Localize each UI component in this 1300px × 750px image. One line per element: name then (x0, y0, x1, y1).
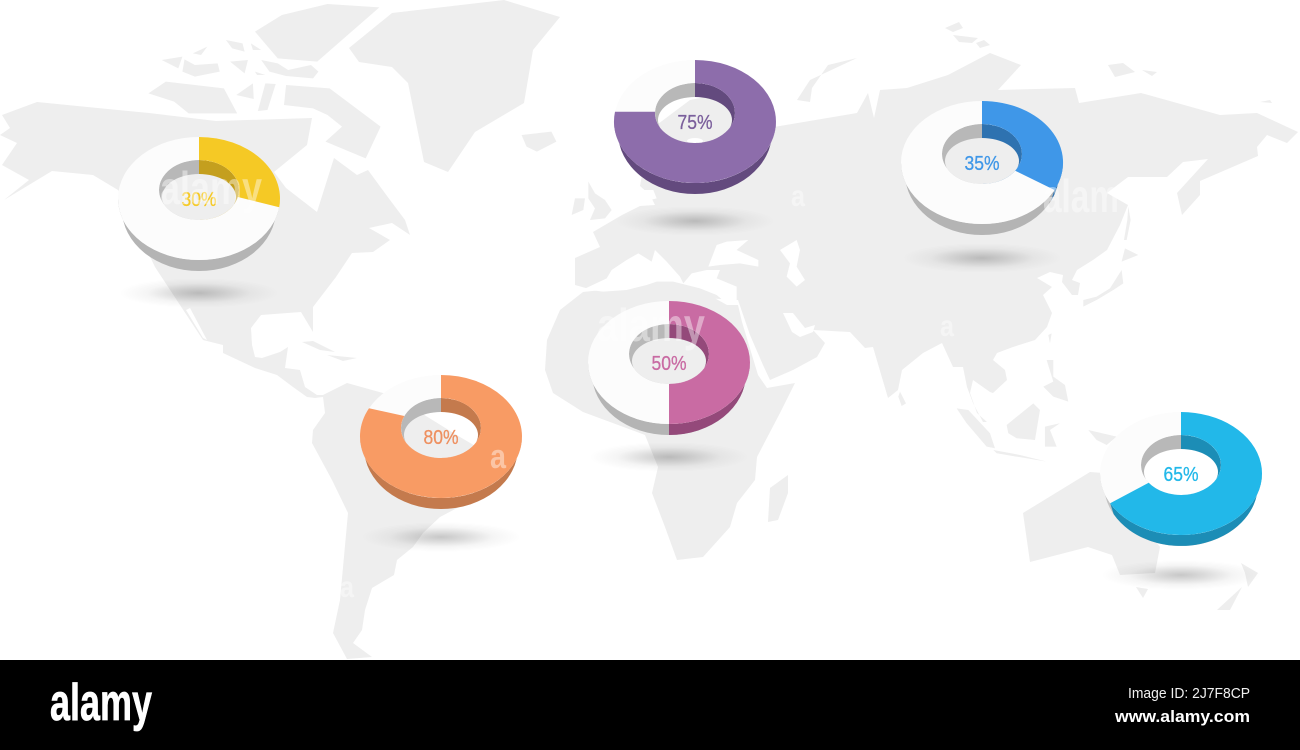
shadows (119, 206, 1261, 590)
watermarks: alamy (160, 162, 262, 214)
slice (360, 375, 522, 498)
Africa (545, 285, 795, 560)
slice (982, 101, 1063, 190)
label: 30% (182, 189, 217, 211)
donut: 30% yellow (118, 137, 280, 271)
Asian islands (898, 207, 1138, 462)
Tasmania and New Zealand (1136, 563, 1258, 610)
North and South America (0, 102, 500, 659)
slice (614, 60, 776, 183)
donut: 80% orange (360, 375, 522, 509)
footer logo: alamy (50, 674, 152, 732)
watermarks (160, 162, 1119, 604)
watermarks: a (940, 310, 954, 343)
slice (669, 301, 750, 424)
Persian Gulf (783, 313, 815, 337)
Baja strait (186, 308, 207, 340)
watermarks: a (340, 571, 354, 604)
donut: 65% cyan (1100, 412, 1262, 546)
label: 50% (652, 353, 687, 375)
watermarks: alamy (597, 299, 705, 351)
label: 35% (964, 153, 1000, 175)
Britain and Ireland (572, 182, 612, 220)
donut: 75% purple (614, 60, 776, 194)
Greenland (349, 0, 560, 172)
donut: 50% pink (588, 301, 750, 435)
watermarks: a (490, 438, 507, 476)
donut: 35% blue (901, 101, 1063, 235)
watermarks: a (791, 180, 805, 213)
watermarks: alam (1043, 170, 1119, 222)
Canadian Arctic islands (148, 4, 556, 158)
footer bar (0, 660, 1300, 750)
seas (186, 138, 815, 340)
Australia (1023, 472, 1160, 575)
slice (199, 137, 280, 207)
image id: Image ID: 2J7F8CP (1128, 686, 1250, 702)
slice (1110, 412, 1262, 535)
Eurasia (575, 53, 1298, 422)
Mediterranean (583, 190, 805, 303)
label: 80% (424, 427, 459, 449)
label: 65% (1164, 464, 1199, 486)
website: www.alamy.com (1114, 707, 1250, 726)
Arctic Russia islands (797, 22, 1272, 103)
Caribbean islands (302, 341, 335, 352)
Baltic gap seen through the purple donut (687, 138, 703, 144)
Madagascar (768, 475, 788, 522)
label: 75% (678, 112, 713, 134)
